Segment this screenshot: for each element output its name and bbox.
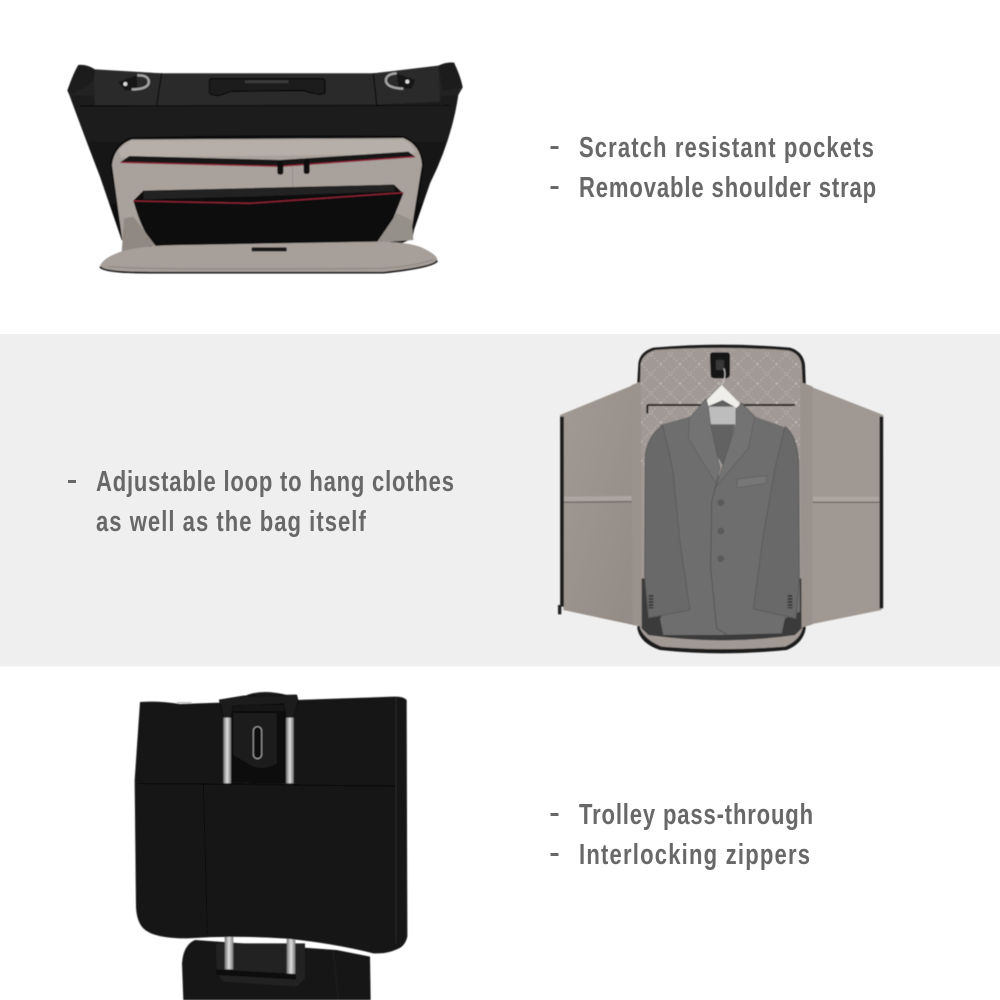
photo: unfolded garment bag with suit [558,345,883,653]
bullet: dash [550,186,558,189]
right wing [811,387,883,624]
text: Adjustable loop line two: as well as the bag itself [96,506,366,538]
corner straps [67,65,95,93]
lower pocket [642,578,802,640]
pass-through panel [232,711,288,783]
centre side strips [632,382,642,627]
bag body [67,62,463,240]
pocket opening [110,135,424,253]
text: Scratch resistant pockets: Scratch resistant pockets [579,132,874,164]
flap tab [252,247,287,251]
upper zipper pocket [121,152,415,166]
icon: left D-ring [118,75,149,91]
inner zip [647,405,795,413]
lower black pocket [133,185,403,247]
garment bag body [135,697,407,953]
text: Trolley pass-through: Trolley pass-through [579,799,813,831]
text: Removable shoulder strap: Removable shoulder strap [579,172,876,204]
lower trolley bar [216,969,296,979]
top band with seam [93,67,440,105]
chest pocket [737,476,767,488]
zipper pulls [277,159,310,175]
left lapel [688,399,720,483]
panel: grey middle band [0,334,1000,666]
left wing [560,385,633,625]
grey lining with piping [112,138,422,247]
jacket opening line [711,485,727,634]
bullet: dash [550,813,558,816]
front flap [100,242,437,273]
dark outer frame [637,345,806,653]
lower trolley poles [225,930,233,969]
bullet: dash [550,146,558,149]
quilted upper lining [641,350,800,468]
photo: open garment bag front pocket [67,62,463,273]
text block: hanging loop feature [68,466,454,538]
lower trolley recess [216,943,305,987]
photo: garment bag on trolley [135,692,407,1000]
trolley badge [253,727,262,759]
bullet: dash [550,853,558,856]
wing fold lines [564,491,879,506]
text block: trolley features [550,799,813,871]
text: Adjustable loop line one: Adjustable loop to hang clothes [96,466,454,498]
jacket back collar [689,400,753,418]
jacket [645,399,800,635]
jacket body [660,417,800,635]
buttons [718,499,724,506]
left sleeve [645,426,690,618]
left and right lining gussets [122,217,155,253]
top carry handle [209,79,325,95]
lining frame [640,348,803,649]
upper trolley poles [223,717,231,783]
right lapel [716,403,755,487]
trouser fold [711,424,735,468]
icon: right D-ring [386,73,415,89]
suitcase [182,940,371,1000]
bullet: dash [68,480,76,483]
sleeve cuff buttons [651,595,790,608]
text block: pocket features [550,132,876,204]
shirt under jacket [708,407,736,424]
right sleeve [753,427,799,618]
hanger [706,368,740,409]
hanging loop bracket [710,352,730,378]
trolley handle [219,695,298,717]
wing zippers [562,417,881,608]
lower pocket panel shade [135,784,407,953]
top zip detail and handle arc [243,692,287,697]
text: Interlocking zippers: Interlocking zippers [579,839,810,871]
